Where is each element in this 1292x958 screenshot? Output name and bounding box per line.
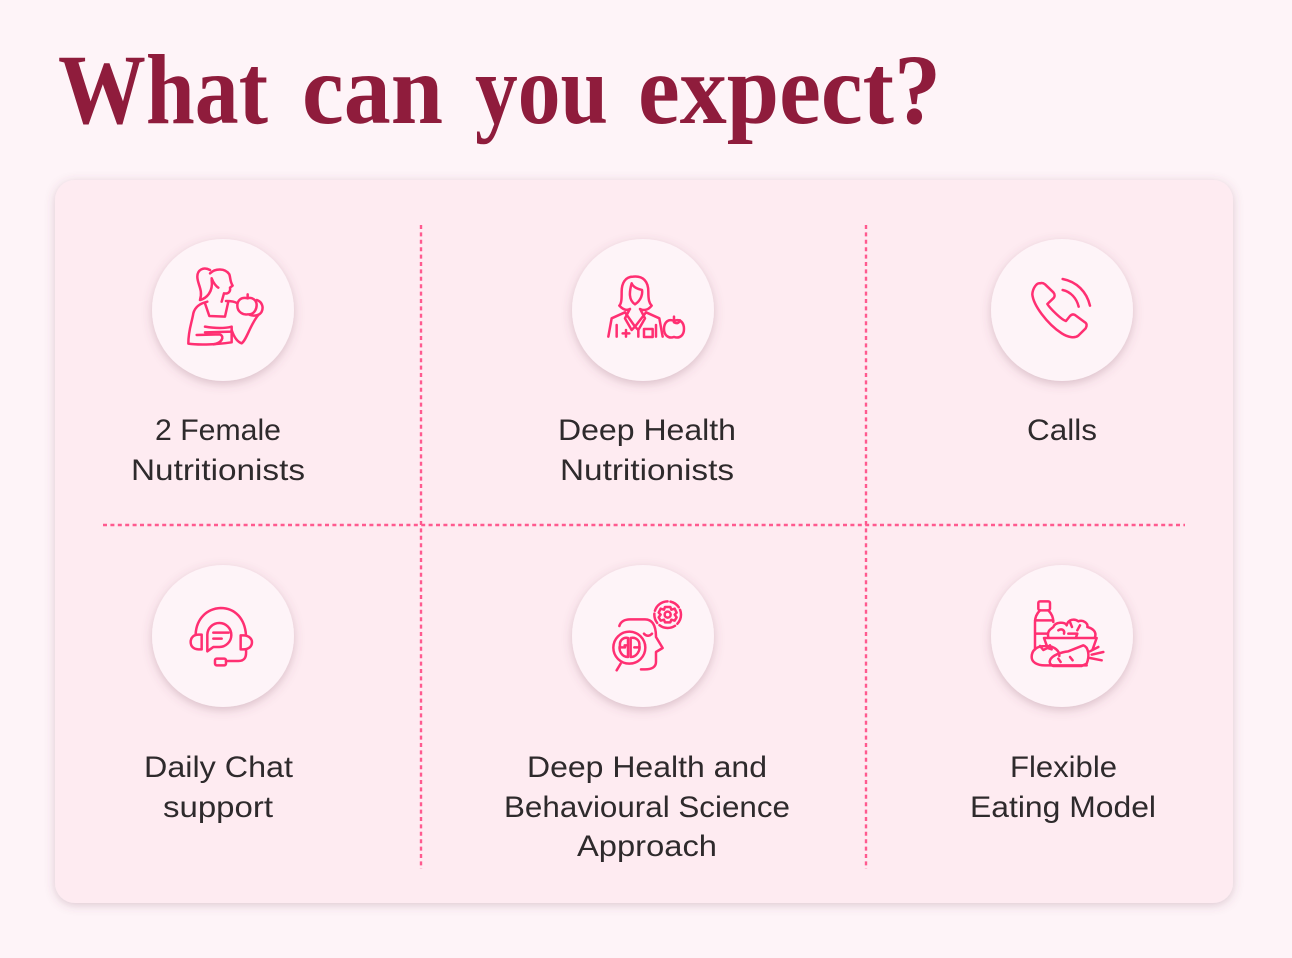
feature: Daily Chat support bbox=[144, 565, 294, 824]
label: Deep Health bbox=[558, 414, 736, 447]
label bbox=[131, 414, 305, 487]
icon: food bowl, bottle and carrot bbox=[1032, 601, 1103, 666]
label: Calls bbox=[1027, 414, 1097, 447]
feature: Calls bbox=[991, 239, 1133, 447]
feature: Deep Health Nutritionists bbox=[558, 239, 736, 487]
feature: Deep Health and Behavioural Science Approach bbox=[504, 565, 790, 863]
title bbox=[58, 34, 941, 145]
feature: 2 Female Nutritionists bbox=[131, 239, 305, 487]
title: expect? bbox=[638, 34, 941, 145]
label: Flexible bbox=[1010, 751, 1117, 784]
icon: phone bbox=[1032, 279, 1090, 337]
feature: Flexible Eating Model bbox=[970, 565, 1156, 824]
title: can bbox=[302, 34, 443, 145]
label: Approach bbox=[577, 830, 717, 863]
label: Deep Health and bbox=[527, 751, 767, 784]
label bbox=[970, 751, 1156, 824]
label: Daily Chat bbox=[144, 751, 294, 784]
panel: features card bbox=[55, 180, 1233, 903]
label: Nutritionists bbox=[131, 454, 305, 487]
label: 2 Female bbox=[155, 414, 281, 447]
label bbox=[504, 751, 790, 863]
label: Nutritionists bbox=[560, 454, 734, 487]
label bbox=[144, 751, 294, 824]
label: Behavioural Science bbox=[504, 791, 790, 824]
icon: head with brain and gear bbox=[613, 601, 681, 670]
label: support bbox=[163, 791, 274, 824]
title: What bbox=[58, 34, 268, 145]
icon: woman with apple bbox=[188, 269, 263, 345]
icon: headset with chat bubble bbox=[191, 608, 252, 665]
label bbox=[558, 414, 736, 487]
title: you bbox=[475, 34, 608, 145]
icon: nutritionist with apple bbox=[608, 277, 684, 338]
label: Eating Model bbox=[970, 791, 1156, 824]
